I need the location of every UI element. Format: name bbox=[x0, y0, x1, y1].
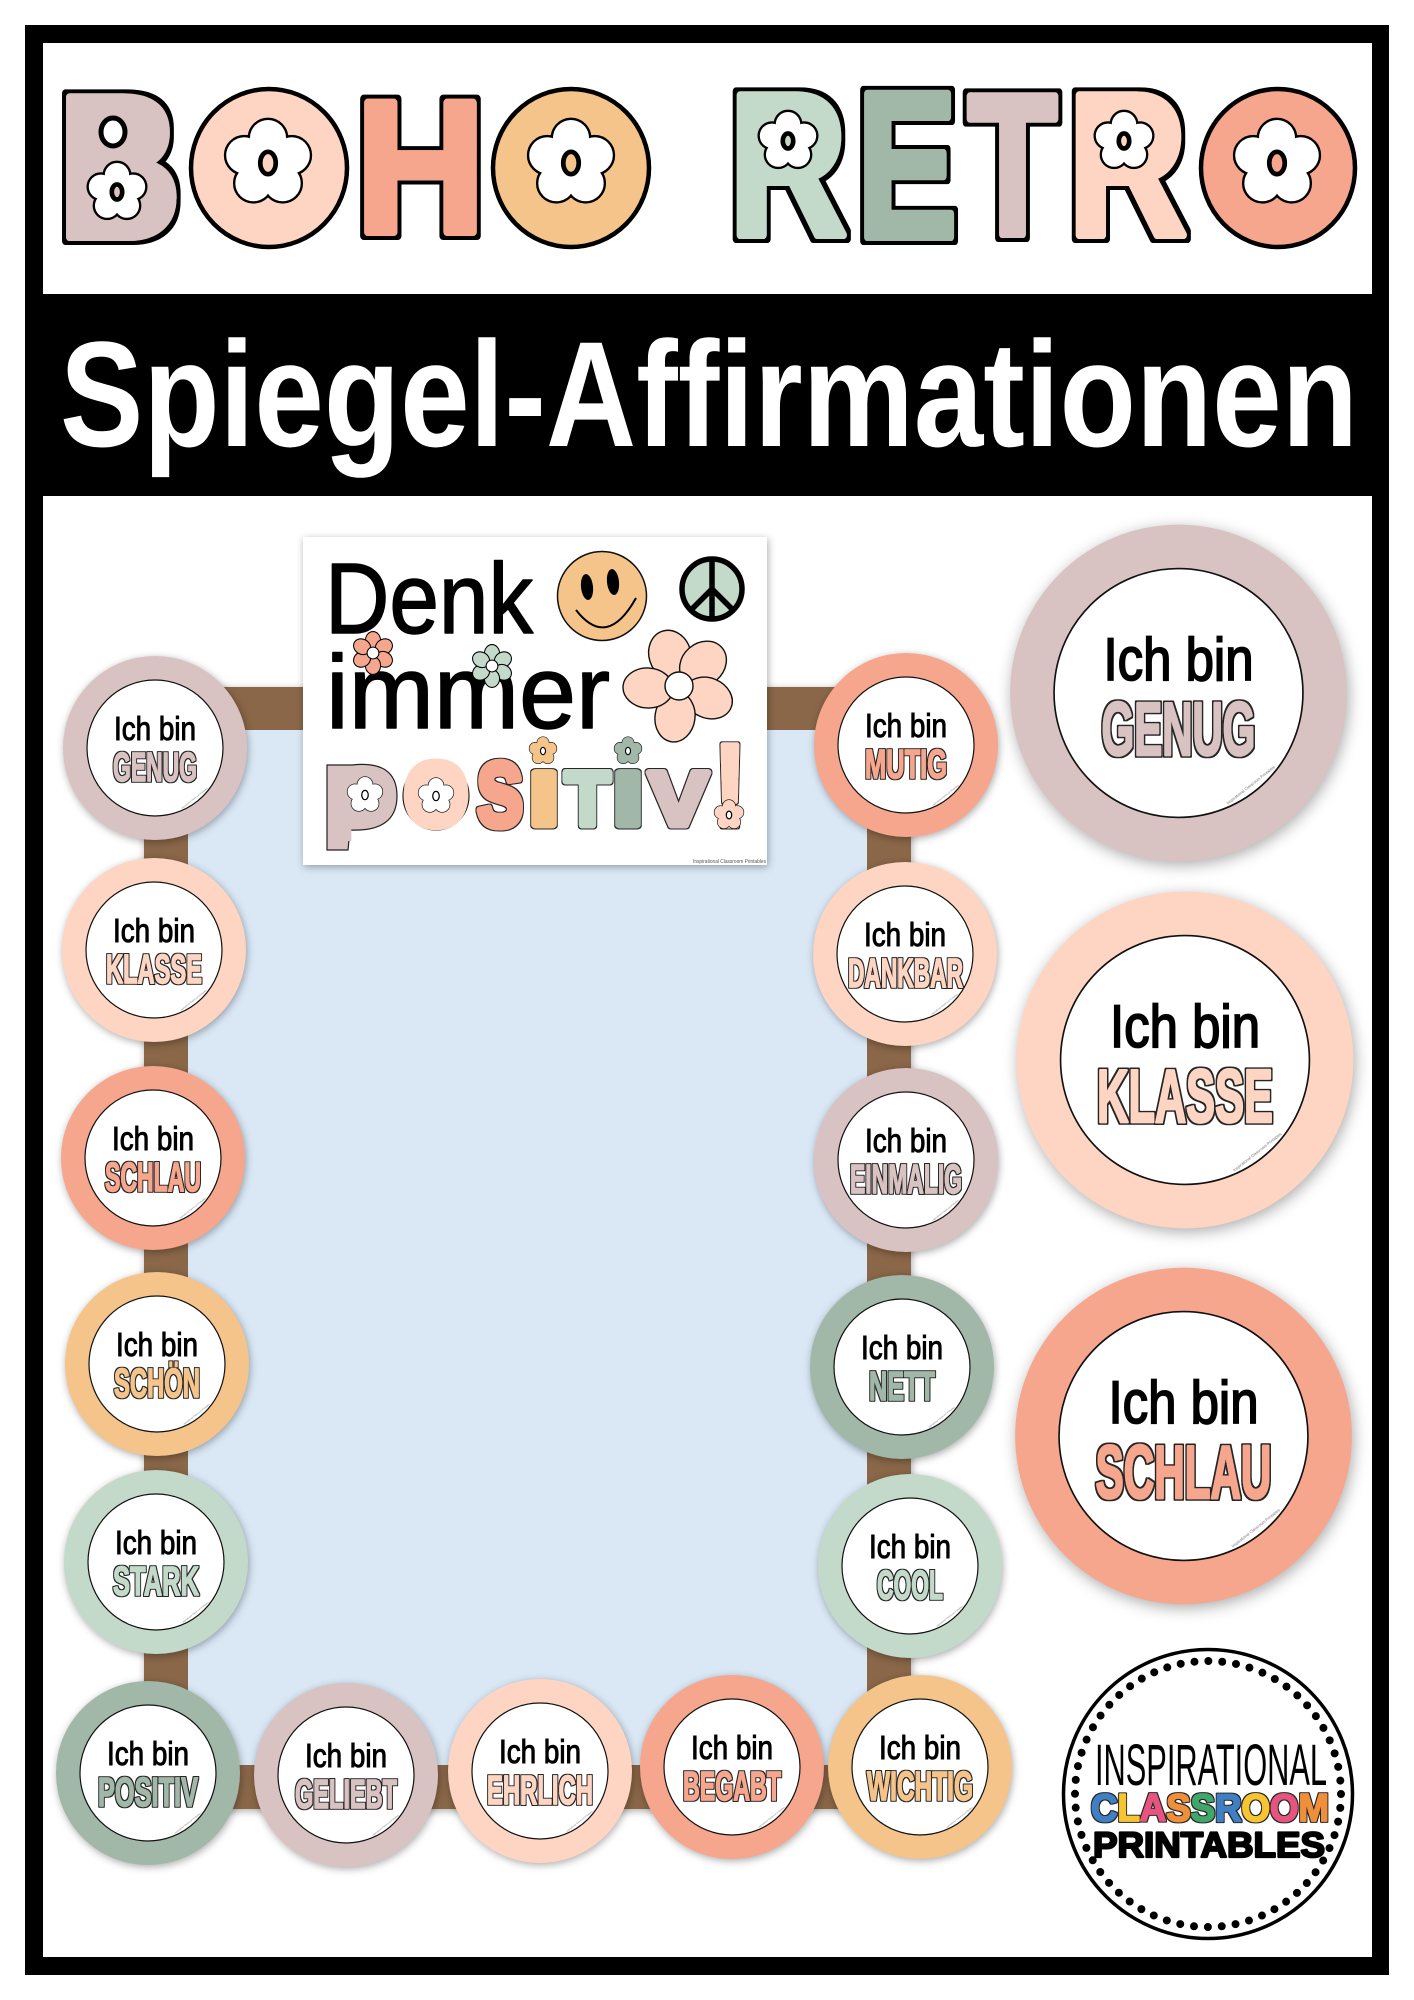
badge: Ich bin SCHÖN: SCHÖN bbox=[114, 1360, 200, 1406]
badge: Ich bin GELIEBT: GELIEBT bbox=[295, 1771, 397, 1817]
badge: Ich bin MUTIG: Ich bin bbox=[865, 707, 947, 744]
badge: Ich bin SCHÖN bbox=[65, 1272, 249, 1456]
letter R: R bbox=[729, 52, 847, 279]
badge: Ich bin STARK: Ich bin bbox=[115, 1524, 197, 1561]
poster: Denk immer positiv bbox=[303, 537, 767, 865]
large badge: Ich bin GENUG: Inspirational Classroom Printables bbox=[1225, 764, 1276, 805]
poster word: positiv bbox=[327, 710, 747, 857]
badge: Ich bin EINMALIG: Inspirational Classroom Printables bbox=[932, 1199, 960, 1222]
badge: Ich bin COOL: Ich bin bbox=[869, 1528, 951, 1565]
poster word: positiv: T bbox=[565, 757, 610, 842]
letter R: R bbox=[1068, 52, 1187, 279]
badge: Ich bin SCHÖN: Ich bin bbox=[116, 1326, 198, 1363]
logo dotted ring bbox=[1075, 1661, 1341, 1927]
badge: Ich bin POSITIV: Inspirational Classroom Printables bbox=[174, 1812, 202, 1835]
badge: Ich bin STARK bbox=[64, 1470, 248, 1654]
badge: Ich bin KLASSE bbox=[62, 858, 246, 1042]
badge: Ich bin DANKBAR bbox=[813, 862, 997, 1046]
badge: Ich bin POSITIV: POSITIV bbox=[98, 1769, 198, 1815]
poster word: positiv: p bbox=[331, 730, 391, 842]
poster text: immer: immer bbox=[326, 635, 610, 751]
mirror board with wooden frame bbox=[144, 687, 911, 1809]
icon: peace sign bbox=[682, 559, 742, 619]
poster credit: Inspirational Classroom Printables bbox=[693, 859, 766, 865]
badge: Ich bin NETT: Ich bin bbox=[861, 1329, 943, 1366]
badge: Ich bin DANKBAR: DANKBAR bbox=[848, 950, 963, 996]
poster word: positiv: o bbox=[399, 710, 473, 857]
badge: Ich bin GENUG: Ich bin bbox=[114, 710, 196, 747]
icon: sage flower bbox=[470, 645, 514, 687]
badge: Ich bin EINMALIG: EINMALIG bbox=[850, 1156, 962, 1202]
badge: Ich bin SCHLAU: SCHLAU bbox=[105, 1154, 201, 1200]
poster word: positiv: s bbox=[476, 720, 524, 852]
badge: Ich bin WICHTIG: Inspirational Classroom Printables bbox=[946, 1806, 974, 1829]
letter O: O bbox=[1205, 60, 1351, 283]
icon: coral flower bbox=[351, 632, 395, 674]
badge: Ich bin NETT bbox=[810, 1275, 994, 1459]
logo text: CLASSROOM: CLASSROOM bbox=[1091, 1787, 1329, 1830]
badge: Ich bin BEGABT: Ich bin bbox=[691, 1729, 773, 1766]
badge: Ich bin BEGABT bbox=[640, 1675, 824, 1859]
badge: Ich bin COOL: COOL bbox=[877, 1562, 943, 1608]
large badge: Ich bin KLASSE: KLASSE bbox=[1097, 1054, 1273, 1138]
badge: Ich bin KLASSE: Inspirational Classroom Printables bbox=[180, 989, 208, 1012]
poster word: positiv: I bbox=[529, 757, 559, 842]
letter O: O bbox=[497, 60, 645, 283]
icon: smiley bbox=[558, 552, 646, 640]
large badge: Ich bin SCHLAU: Inspirational Classroom Printables bbox=[1230, 1507, 1281, 1548]
badge: Ich bin GELIEBT bbox=[254, 1683, 438, 1867]
badge: Ich bin BEGABT: BEGABT bbox=[683, 1763, 781, 1809]
logo: Inspirational Classroom Printables bbox=[1064, 1650, 1352, 1938]
badge: Ich bin NETT: Inspirational Classroom Printables bbox=[928, 1406, 956, 1429]
large badge: Ich bin KLASSE: Ich bin bbox=[1110, 992, 1260, 1060]
badge: Ich bin COOL bbox=[818, 1474, 1002, 1658]
badge: Ich bin BEGABT: Inspirational Classroom Printables bbox=[758, 1806, 786, 1829]
mirror surface bbox=[188, 730, 867, 1765]
badge: Ich bin KLASSE: Ich bin bbox=[113, 912, 195, 949]
large badge: Ich bin SCHLAU: SCHLAU bbox=[1096, 1430, 1271, 1514]
large badge: Ich bin KLASSE bbox=[1017, 892, 1353, 1228]
badge: Ich bin MUTIG: Inspirational Classroom Printables bbox=[932, 784, 960, 807]
badge: Ich bin MUTIG: MUTIG bbox=[865, 741, 947, 787]
title panel bbox=[43, 43, 1372, 294]
badge: Ich bin WICHTIG: WICHTIG bbox=[867, 1763, 973, 1809]
badge: Ich bin GENUG bbox=[63, 656, 247, 840]
badge: Ich bin GELIEBT: Inspirational Classroom Printables bbox=[372, 1814, 400, 1837]
badge: Ich bin WICHTIG: Ich bin bbox=[879, 1729, 961, 1766]
main white panel bbox=[43, 496, 1372, 1957]
letter H: H bbox=[356, 62, 485, 272]
badge: Ich bin EINMALIG bbox=[814, 1068, 998, 1252]
badge: Ich bin STARK: STARK bbox=[113, 1558, 199, 1604]
badge: Ich bin SCHLAU bbox=[61, 1066, 245, 1250]
letter B: B bbox=[58, 54, 181, 281]
badge: Ich bin EHRLICH bbox=[448, 1679, 632, 1863]
badge: Ich bin SCHÖN: Inspirational Classroom Printables bbox=[183, 1403, 211, 1426]
badge: Ich bin GENUG: GENUG bbox=[113, 744, 197, 790]
badge: Ich bin MUTIG bbox=[814, 653, 998, 837]
badge: Ich bin POSITIV bbox=[56, 1681, 240, 1865]
logo text: PRINTABLES: PRINTABLES bbox=[1093, 1826, 1325, 1865]
large badge: Ich bin GENUG: Ich bin bbox=[1103, 625, 1254, 693]
poster word: positiv: V bbox=[649, 757, 708, 842]
badge: Ich bin SCHLAU: Inspirational Classroom Printables bbox=[179, 1197, 207, 1220]
badge: Ich bin EHRLICH: EHRLICH bbox=[487, 1767, 593, 1813]
badge: Ich bin DANKBAR: Ich bin bbox=[864, 916, 946, 953]
badge: Ich bin EINMALIG: Ich bin bbox=[865, 1122, 947, 1159]
poster text: Denk: Denk bbox=[325, 543, 534, 655]
badge: Ich bin GENUG: Inspirational Classroom Printables bbox=[181, 787, 209, 810]
badge: Ich bin DANKBAR: Inspirational Classroom Printables bbox=[931, 993, 959, 1016]
title: BOHO RETRO bbox=[58, 50, 1355, 283]
badge: Ich bin WICHTIG bbox=[828, 1675, 1012, 1859]
large badge: Ich bin KLASSE: Inspirational Classroom Printables bbox=[1232, 1131, 1283, 1172]
badge: Ich bin POSITIV: Ich bin bbox=[107, 1735, 189, 1772]
badge: Ich bin EHRLICH: Inspirational Classroom Printables bbox=[566, 1810, 594, 1833]
large badge: Ich bin SCHLAU bbox=[1015, 1268, 1352, 1604]
badge: Ich bin SCHLAU: Ich bin bbox=[112, 1120, 194, 1157]
badge: Ich bin KLASSE: KLASSE bbox=[106, 946, 202, 992]
letter T: T bbox=[968, 54, 1057, 277]
large badge: Ich bin SCHLAU: Ich bin bbox=[1108, 1368, 1259, 1436]
poster word: positiv: I bbox=[613, 757, 643, 842]
badge: Ich bin NETT: NETT bbox=[869, 1363, 935, 1409]
letter O: O bbox=[195, 60, 343, 283]
poster word: positiv: ! bbox=[713, 720, 747, 852]
icon: large peach flower bbox=[622, 625, 739, 745]
badge: Ich bin STARK: Inspirational Classroom Printables bbox=[182, 1601, 210, 1624]
badge: Ich bin COOL: Inspirational Classroom Printables bbox=[936, 1605, 964, 1628]
badge: Ich bin GELIEBT: Ich bin bbox=[305, 1737, 387, 1774]
letter E: E bbox=[857, 50, 957, 282]
large badge: Ich bin GENUG: GENUG bbox=[1102, 687, 1255, 771]
large badge: Ich bin GENUG bbox=[1010, 525, 1347, 861]
badge: Ich bin EHRLICH: Ich bin bbox=[499, 1733, 581, 1770]
logo ring bbox=[1064, 1650, 1352, 1938]
